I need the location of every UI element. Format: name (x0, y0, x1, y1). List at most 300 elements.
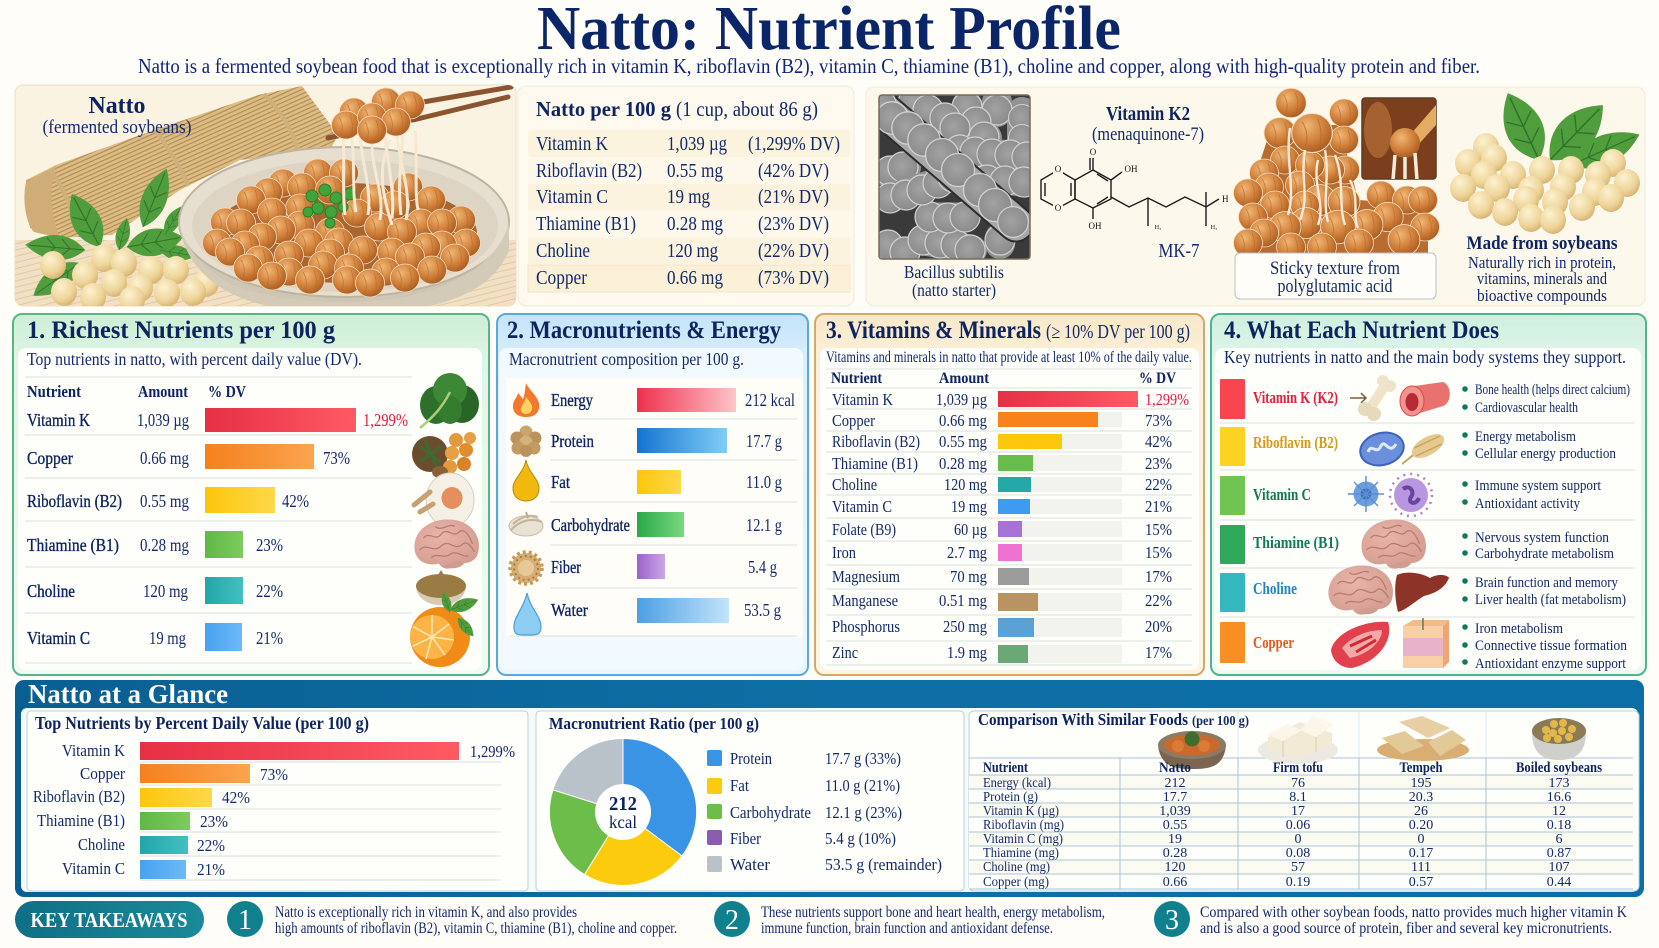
table body rows: 0.17 (1409, 846, 1433, 861)
table body rows: 120 (1164, 860, 1186, 875)
row: vitamin c: Vitamin C (27, 628, 90, 648)
table body rows: 26 (1414, 804, 1428, 819)
row: iron: 2.7 mg (947, 543, 987, 562)
icon: protein beans (510, 426, 542, 457)
icon: MK-7 molecule diagram: H₃ (1155, 225, 1161, 231)
row: manganese: Manganese (832, 591, 898, 610)
row: vitamin c role (1220, 474, 1602, 516)
takeaway 2: These nutrients support bone and heart health, energy metabolism, (761, 904, 1105, 921)
row: magnesium: Magnesium (832, 567, 900, 586)
legend: Fiber (730, 829, 761, 848)
chart: top nutrients by percent daily value: Vitamin K (62, 741, 126, 760)
table body rows: 12 (1552, 804, 1566, 819)
vitamin k2 label (1092, 104, 1204, 145)
row: vitamin c: 21% (256, 628, 283, 648)
icon: fiber (510, 552, 542, 584)
chart: top nutrients by percent daily value: 21% (197, 860, 225, 879)
row: protein: 17.7 g (746, 431, 782, 451)
table body rows: 0.06 (1286, 818, 1310, 833)
icon: flame (513, 383, 539, 417)
row: thiamine: 0.28 mg (939, 454, 987, 473)
icon: MK-7 molecule diagram: O (1055, 203, 1062, 213)
table body rows: Choline (mg) (983, 860, 1050, 875)
row: fat: 11.0 g (746, 472, 782, 492)
row: copper: Copper (832, 411, 875, 430)
table header: % DV (208, 382, 247, 401)
table body rows: 195 (1410, 776, 1432, 791)
row: riboflavin: 42% (1145, 432, 1172, 451)
donut centre label: 212 (609, 793, 637, 815)
table rows: Copper (536, 267, 587, 289)
icon: MK-7 molecule diagram: H (1222, 194, 1229, 204)
icon: inset close-up of sticky strands (1362, 98, 1436, 180)
legend: 11.0 g (21%) (825, 776, 900, 795)
table body rows: 0.19 (1286, 875, 1310, 890)
row: energy: Energy (551, 390, 593, 410)
heading: 4. What Each Nutrient Does (1224, 315, 1499, 344)
table body rows: 0.28 (1163, 846, 1187, 861)
table rows (536, 133, 840, 289)
table title: (per 100 g) (1192, 714, 1249, 729)
row: vitamin k2 role: Vitamin K (K2) (1253, 388, 1338, 407)
row: copper: 0.66 mg (140, 448, 189, 468)
icon: MK-7 molecule diagram: OH (1124, 164, 1138, 174)
panel: science and origin (864, 85, 1646, 306)
table heading: (1 cup, about 86 g) (676, 97, 818, 121)
row: vitamin k: Vitamin K (832, 390, 893, 409)
table header: Nutrient (27, 382, 81, 401)
row: thiamine (27, 531, 283, 558)
icon: immune cell purple (1390, 474, 1432, 516)
row: vitamin c role: Antioxidant activity (1475, 496, 1580, 512)
table body rows: 0.55 (1163, 818, 1187, 833)
row: folate (832, 520, 1172, 539)
icon: straw-wrapped soybean bundle (24, 86, 338, 238)
row: fat (551, 470, 782, 494)
icon: ceramic bowl of natto (179, 147, 509, 310)
row: copper: 73% (1145, 411, 1172, 430)
row: choline role: Choline (1253, 579, 1297, 598)
key takeaways badge (15, 901, 204, 938)
legend: Fat (730, 776, 749, 795)
heading: 2. Macronutrients & Energy (507, 315, 781, 344)
table body rows: 8.1 (1289, 790, 1307, 805)
table rows: Thiamine (B1) (536, 213, 636, 235)
icon: sticky natto beans (1234, 88, 1440, 261)
icon: beans held by chopsticks (332, 88, 424, 144)
row: riboflavin role: Cellular energy production (1475, 446, 1616, 462)
takeaway 1: Natto is exceptionally rich in vitamin K, and also provides (275, 904, 577, 921)
takeaway 3 (1154, 901, 1627, 937)
chart: top nutrients by percent daily value: 42% (222, 788, 250, 807)
icon: natto bowl (1158, 731, 1226, 769)
row: riboflavin: 0.55 mg (140, 491, 189, 511)
icon: firm tofu (1258, 716, 1338, 764)
icon: oil drop (513, 460, 539, 501)
row: vitamin k2 role: Cardiovascular health (1475, 400, 1578, 416)
icon: brain (414, 519, 479, 569)
icon: liver (1395, 573, 1449, 612)
table body rows: 173 (1548, 776, 1570, 791)
table header row (983, 760, 1602, 776)
row: copper: Copper (27, 448, 73, 468)
icon: soybeans (40, 244, 218, 306)
row: choline (27, 577, 283, 604)
table body rows: Protein (g) (983, 790, 1038, 805)
row: thiamine: Thiamine (B1) (27, 535, 119, 556)
table body rows: 107 (1548, 860, 1570, 875)
table body rows: Thiamine (mg) (983, 846, 1059, 861)
chart: top nutrients by percent daily value (27, 711, 528, 891)
row: folate: 15% (1145, 520, 1172, 539)
row: energy (551, 388, 795, 412)
table heading: Natto per 100 g (536, 97, 671, 121)
icon: sticky strings (343, 130, 418, 225)
chart: top nutrients by percent daily value: Copper (80, 764, 125, 783)
row: riboflavin role (1220, 427, 1616, 470)
icon: immune cell blue (1348, 476, 1384, 512)
icon: water drop (514, 593, 541, 635)
table header (27, 382, 247, 401)
takeaway 2: 2 (725, 905, 739, 936)
icon: tempeh (1377, 716, 1469, 761)
table body rows: 17.7 (1163, 790, 1187, 805)
row: choline: Choline (832, 475, 877, 494)
vitamin k2 label: (menaquinone-7) (1092, 125, 1204, 145)
row: water: 53.5 g (744, 600, 781, 620)
table rows: (22% DV) (758, 240, 829, 262)
icon: chopsticks (328, 87, 511, 138)
icon: brain (1328, 565, 1393, 615)
callout: sticky texture: polyglutamic acid (1278, 277, 1393, 297)
row: thiamine role: Carbohydrate metabolism (1475, 546, 1614, 562)
table header row: Firm tofu (1273, 760, 1323, 776)
callout: sticky texture: Sticky texture from (1270, 259, 1401, 279)
row: water: Water (551, 600, 588, 620)
hero label (42, 93, 192, 138)
panel 3: vitamins and minerals (815, 314, 1204, 675)
MK-7 label: MK-7 (1158, 241, 1200, 262)
row: vitamin k: 1,299% (363, 410, 408, 430)
table rows: (1,299% DV) (748, 133, 840, 155)
table rows: Choline (536, 240, 590, 262)
row: choline role: Brain function and memory (1475, 575, 1618, 591)
row: thiamine (832, 454, 1172, 473)
takeaway 2: immune function, brain function and antioxidant defense. (761, 920, 1053, 937)
chart: macronutrient ratio donut: Macronutrient Ratio (per 100 g) (549, 714, 759, 733)
table rows: (42% DV) (758, 160, 829, 182)
table body rows (983, 776, 1571, 890)
row: vitamin k: 1,039 µg (936, 390, 987, 409)
table rows: 19 mg (667, 186, 710, 208)
icon: MK-7 molecule diagram: O (1090, 147, 1097, 157)
takeaway 1: 1 (238, 905, 252, 936)
row: zinc: 1.9 mg (947, 643, 987, 662)
row: fiber: 5.4 g (748, 557, 777, 577)
row: riboflavin: 42% (282, 491, 309, 511)
row: thiamine: 23% (1145, 454, 1172, 473)
row: energy: 212 kcal (745, 390, 795, 410)
row: copper role (1220, 618, 1627, 672)
row: manganese (832, 591, 1172, 611)
icon: spinach (420, 373, 479, 428)
icon: bone (1358, 375, 1396, 421)
heading: 3. Vitamins & Minerals (826, 315, 1041, 344)
row: vitamin k: 1,039 µg (137, 410, 189, 430)
table header: Nutrient (831, 370, 883, 387)
row: magnesium (832, 567, 1172, 586)
row: vitamin c: 21% (1145, 497, 1172, 516)
icon: bacillus micrograph (878, 94, 1031, 260)
row: copper (832, 411, 1172, 430)
donut segments (549, 738, 697, 886)
row: vitamin c (27, 623, 283, 651)
row: zinc (832, 643, 1172, 663)
row: fiber (551, 554, 777, 579)
row: fat: Fat (551, 472, 570, 492)
icon: green leaves (25, 168, 192, 296)
row: copper: 73% (323, 448, 350, 468)
row: manganese: 22% (1145, 591, 1172, 610)
row: phosphorus: 20% (1145, 617, 1172, 636)
table header: Amount (939, 370, 990, 387)
table rows: (73% DV) (758, 267, 829, 289)
icon: red blood vessel (1331, 622, 1389, 668)
row: choline: 22% (256, 581, 283, 601)
caption: made from soybeans (1466, 234, 1618, 305)
chart: top nutrients by percent daily value: Choline (78, 835, 125, 854)
table header row: Boiled soybeans (1516, 760, 1602, 776)
row: thiamine: Thiamine (B1) (832, 454, 918, 473)
row: manganese: 0.51 mg (939, 591, 987, 610)
row: phosphorus: 250 mg (943, 617, 987, 636)
icon: seed bowl (416, 570, 466, 605)
heading: Natto at a Glance (28, 679, 228, 709)
table body rows: 0.08 (1286, 846, 1310, 861)
table header row: Natto (1159, 760, 1191, 776)
row: thiamine: 23% (256, 535, 283, 555)
table body rows: 57 (1291, 860, 1305, 875)
chart: top nutrients by percent daily value: Vitamin C (62, 859, 125, 878)
row: riboflavin (27, 487, 309, 513)
row: vitamin c role: Vitamin C (1253, 485, 1311, 504)
table body rows: Energy (kcal) (983, 776, 1051, 791)
table body rows: 19 (1168, 832, 1182, 847)
chart: top nutrients by percent daily value: Thiamine (B1) (37, 811, 125, 830)
row: folate: Folate (B9) (832, 520, 896, 539)
row: choline role (1220, 565, 1626, 615)
row: carbohydrate: 12.1 g (746, 515, 782, 535)
description: Macronutrient composition per 100 g. (509, 349, 744, 369)
takeaway 3: 3 (1165, 905, 1179, 936)
icon: carbohydrate (509, 512, 543, 536)
table rows: Vitamin C (536, 186, 608, 208)
row: protein: Protein (551, 431, 594, 451)
table body rows: 0 (1294, 832, 1302, 847)
icon: artery (1400, 382, 1450, 416)
row: zinc: 17% (1145, 643, 1172, 662)
row: copper: 0.66 mg (939, 411, 987, 430)
row: carbohydrate (551, 512, 782, 537)
icon: brain (1361, 519, 1426, 569)
takeaway 3: and is also a good source of protein, fiber and several key micronutrients. (1200, 920, 1612, 937)
row: copper role: Antioxidant enzyme support (1475, 656, 1627, 672)
row: copper role: Connective tissue formation (1475, 638, 1627, 654)
row: fiber: Fiber (551, 557, 581, 577)
donut centre label: kcal (609, 812, 637, 832)
table rows: 0.66 mg (667, 267, 723, 289)
row: riboflavin role: Energy metabolism (1475, 429, 1576, 445)
chart: macronutrient ratio donut (536, 711, 964, 891)
hero label: Natto (88, 93, 146, 119)
table rows: Vitamin K (536, 133, 608, 155)
chart: top nutrients by percent daily value: 1,299% (470, 742, 515, 761)
table body rows: 6 (1556, 832, 1562, 847)
row: iron (832, 543, 1172, 562)
row: choline: 22% (1145, 475, 1172, 494)
table body rows: 1,039 (1159, 804, 1191, 819)
icon: MK-7 molecule diagram: H₃ (1211, 225, 1217, 231)
icon: MK-7 molecule diagram: OH (1088, 221, 1102, 231)
row: riboflavin (832, 432, 1172, 451)
row: choline: 120 mg (143, 581, 188, 601)
legend: 5.4 g (10%) (825, 829, 896, 848)
icon: copper-rich foods (412, 432, 476, 478)
row: zinc: Zinc (832, 643, 858, 662)
table body rows: 0.57 (1409, 875, 1433, 890)
row: iron: Iron (832, 543, 856, 562)
legend (707, 749, 942, 874)
row: choline role: Liver health (fat metabolism) (1475, 592, 1626, 608)
icon: skin tissue (1403, 618, 1449, 668)
table body rows: 0.66 (1163, 875, 1187, 890)
legend: Water (730, 855, 770, 874)
vitamin k2 label: Vitamin K2 (1106, 104, 1190, 125)
icon: soybeans with leaves (1450, 85, 1646, 234)
caption: bacillus subtilis (904, 262, 1004, 300)
table body rows: 212 (1164, 776, 1186, 791)
row: phosphorus (832, 617, 1172, 637)
table rows: (23% DV) (758, 213, 829, 235)
row: copper (27, 444, 350, 469)
icon: mitochondrion (1357, 428, 1407, 470)
table rows: 120 mg (667, 240, 718, 262)
row: magnesium: 70 mg (950, 567, 987, 586)
row: vitamin k (832, 390, 1189, 409)
row: vitamin c: 19 mg (149, 628, 186, 648)
table title: Comparison With Similar Foods (978, 710, 1188, 729)
chart: top nutrients by percent daily value: 22% (197, 836, 225, 855)
table rows: (21% DV) (758, 186, 829, 208)
table body rows: 16.6 (1547, 790, 1571, 805)
caption: made from soybeans: Naturally rich in protein, (1468, 253, 1616, 272)
icon: green onions (303, 184, 356, 228)
row: vitamin k2 role (1220, 375, 1630, 421)
table body rows: 0.18 (1547, 818, 1571, 833)
icon: wheat (1402, 429, 1448, 464)
caption: bacillus subtilis: (natto starter) (912, 280, 996, 300)
takeaway 2 (714, 901, 1105, 937)
legend: Protein (730, 749, 772, 768)
table header row: Tempeh (1400, 760, 1442, 776)
row: thiamine role (1220, 519, 1614, 569)
key takeaways badge: KEY TAKEAWAYS (30, 908, 188, 932)
table body rows: Copper (mg) (983, 875, 1049, 890)
hero label: (fermented soybeans) (42, 117, 192, 138)
table: comparison with similar foods (969, 710, 1639, 891)
panel: natto per 100 g table (518, 86, 854, 306)
caption: bacillus subtilis: Bacillus subtilis (904, 262, 1004, 282)
row: water (551, 598, 781, 623)
table body rows: 20.3 (1409, 790, 1433, 805)
row: riboflavin: Riboflavin (B2) (27, 491, 122, 512)
row: choline: 120 mg (944, 475, 987, 494)
table body rows: 0.20 (1409, 818, 1433, 833)
icon: MK-7 molecule diagram (1041, 147, 1229, 231)
panel: natto hero illustration (15, 85, 516, 314)
row: vitamin k (27, 408, 408, 432)
description: Vitamins and minerals in natto that provide at least 10% of the daily value. (826, 349, 1192, 366)
row: thiamine: 0.28 mg (140, 535, 189, 555)
table body rows: 0.87 (1547, 846, 1571, 861)
chart: top nutrients by percent daily value: 23% (200, 812, 228, 831)
legend: 53.5 g (remainder) (825, 855, 942, 874)
chart: top nutrients by percent daily value: Riboflavin (B2) (33, 787, 125, 806)
row: thiamine role: Thiamine (B1) (1253, 533, 1339, 552)
callout: sticky texture (1235, 253, 1436, 299)
row: carbohydrate: Carbohydrate (551, 515, 630, 535)
section: natto at a glance (15, 679, 1644, 897)
panel 2: macronutrients (497, 314, 808, 675)
legend: 12.1 g (23%) (825, 803, 902, 822)
table header: Amount (138, 382, 188, 401)
chart: top nutrients by percent daily value: Top Nutrients by Percent Daily Value (per 100 g) (35, 713, 369, 733)
table body rows: 0 (1418, 832, 1424, 847)
row: iron: 15% (1145, 543, 1172, 562)
panel 4: what each nutrient does (1211, 314, 1646, 675)
table rows: 1,039 µg (667, 133, 727, 155)
row: vitamin k: Vitamin K (27, 410, 90, 430)
row: phosphorus: Phosphorus (832, 617, 900, 636)
row: folate: 60 µg (954, 520, 987, 539)
donut centre label (609, 793, 637, 832)
caption: made from soybeans: bioactive compounds (1477, 286, 1607, 305)
heading: 1. Richest Nutrients per 100 g (27, 315, 335, 344)
icon: MK-7 molecule diagram: O (1055, 164, 1062, 174)
row: magnesium: 17% (1145, 567, 1172, 586)
subtitle: Natto is a fermented soybean food that is exceptionally rich in vitamin K, riboflavin (B2), vitamin C, thiamine (B1), choline and copper, along with high-quality protein and fiber. (138, 54, 1480, 78)
row: vitamin c: Vitamin C (832, 497, 892, 516)
table body rows: Vitamin C (mg) (983, 832, 1063, 847)
row: copper role: Copper (1253, 633, 1294, 652)
table heading (536, 97, 818, 121)
description: Top nutrients in natto, with percent daily value (DV). (27, 349, 362, 370)
table body rows: 0.44 (1547, 875, 1571, 890)
row: choline: Choline (27, 581, 75, 601)
icon: orange (410, 591, 480, 667)
table body rows: Vitamin K (µg) (983, 804, 1059, 819)
table header row: Nutrient (983, 760, 1028, 776)
heading: (≥ 10% DV per 100 g) (1046, 322, 1190, 343)
table header: % DV (1139, 370, 1176, 387)
row: riboflavin role: Riboflavin (B2) (1253, 433, 1338, 452)
table body rows: 111 (1411, 860, 1431, 875)
icon: boiled soybeans bowl (1532, 718, 1586, 760)
legend: Carbohydrate (730, 803, 811, 822)
panel 1: richest nutrients (13, 314, 489, 675)
row: protein (551, 428, 782, 453)
legend: 17.7 g (33%) (825, 749, 901, 768)
